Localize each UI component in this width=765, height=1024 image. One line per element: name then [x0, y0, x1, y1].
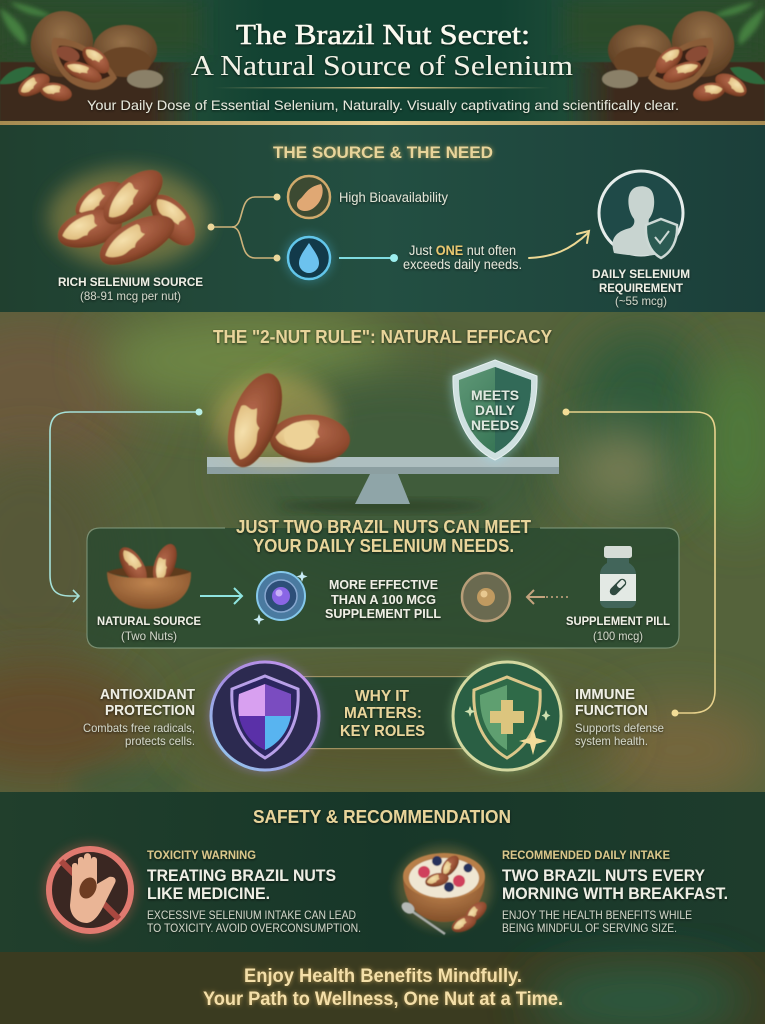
text: more effective: SUPPLEMENT PILL	[325, 606, 441, 621]
chart: balance scale	[207, 358, 559, 511]
title: A Natural Source of Selenium	[191, 50, 573, 82]
text: more effective: MORE EFFECTIVE	[329, 577, 438, 592]
connector: teal line	[339, 254, 398, 262]
connector: gold loop	[562, 408, 715, 716]
title: The Brazil Nut Secret:	[236, 20, 530, 51]
text: antioxidant protection: PROTECTION	[105, 703, 195, 719]
label: supplement pill: SUPPLEMENT PILL	[566, 614, 670, 628]
icon: bowl with nuts	[107, 541, 191, 609]
heading: THE SOURCE & THE NEED	[273, 143, 493, 162]
text: toxicity warning: TREATING BRAZIL NUTS	[147, 866, 336, 885]
background: section one	[0, 125, 765, 312]
panel: the source and the need	[48, 143, 690, 308]
text: recommended daily intake: BEING MINDFUL OF SERVING SIZE.	[502, 921, 677, 935]
text: toxicity warning: LIKE MEDICINE.	[147, 884, 270, 903]
panel: two nut rule	[50, 327, 715, 772]
text: why it matters: WHY IT	[355, 688, 410, 705]
heading: SAFETY & RECOMMENDATION	[253, 807, 511, 827]
panel: why it matters	[83, 660, 664, 772]
band	[300, 676, 470, 749]
label: rich selenium source: (88-91 mcg per nut)	[80, 289, 181, 303]
left forest and nut scene	[0, 0, 200, 121]
label: natural source	[97, 614, 201, 643]
icon: immune shield	[451, 660, 563, 772]
arrow: natural to orb	[200, 588, 242, 604]
closing message: Enjoy Health Benefits Mindfully.	[244, 966, 522, 987]
text: immune function: system health.	[575, 734, 648, 748]
closing message	[203, 966, 563, 1010]
text: recommended daily intake: ENJOY THE HEALTH BENEFITS WHILE	[502, 908, 692, 922]
icon: person with shield	[599, 171, 683, 258]
panel: header	[0, 0, 765, 121]
icon: shield meets daily needs	[451, 358, 539, 463]
right forest and nut scene	[565, 0, 765, 121]
text: recommended daily intake	[502, 848, 728, 935]
text: just one nut: exceeds daily needs.	[403, 257, 522, 272]
label: rich selenium source: RICH SELENIUM SOURCE	[58, 275, 203, 289]
text: antioxidant protection: Combats free radicals,	[83, 721, 195, 735]
label: daily selenium requirement: (~55 mcg)	[615, 294, 667, 308]
background: footer	[0, 952, 765, 1024]
icon: prohibition hand	[43, 843, 137, 937]
arrow: to requirement	[529, 231, 589, 258]
text: meets daily needs: DAILY	[475, 402, 516, 418]
arrow: pill to cell	[527, 590, 570, 604]
text: toxicity warning: EXCESSIVE SELENIUM INTAKE CAN LEAD	[147, 908, 356, 922]
icon: antioxidant shield	[209, 660, 321, 772]
text: meets daily needs	[471, 387, 519, 433]
label: daily selenium requirement: DAILY SELENIUM	[592, 267, 690, 281]
text: immune function	[575, 687, 664, 748]
icon: selenium nuts pile	[48, 160, 208, 274]
text: more effective: THAN A 100 MCG	[331, 592, 436, 607]
icon: supplement bottle	[600, 546, 636, 608]
text: antioxidant protection	[83, 687, 195, 748]
text: toxicity warning: TO TOXICITY. AVOID OVERCONSUMPTION.	[147, 921, 361, 935]
heading: THE "2-NUT RULE": NATURAL EFFICACY	[213, 327, 552, 347]
closing message: Your Path to Wellness, One Nut at a Time.	[203, 989, 563, 1010]
heading: just two brazil nuts: JUST TWO BRAZIL NUTS CAN MEET	[236, 517, 531, 537]
text: more effective	[325, 577, 441, 621]
text: antioxidant protection: ANTIOXIDANT	[100, 687, 195, 703]
icon: breakfast bowl	[396, 846, 492, 935]
text: meets daily needs: MEETS	[471, 387, 519, 403]
text: recommended daily intake: RECOMMENDED DAILY INTAKE	[502, 848, 670, 862]
label: natural source: (Two Nuts)	[121, 629, 177, 643]
text: recommended daily intake: MORNING WITH BREAKFAST.	[502, 884, 728, 903]
label: daily selenium requirement: REQUIREMENT	[599, 281, 684, 295]
text: toxicity warning: TOXICITY WARNING	[147, 848, 256, 862]
text: toxicity warning	[147, 848, 361, 935]
text: why it matters: MATTERS:	[344, 705, 422, 722]
heading: just two brazil nuts	[236, 517, 531, 556]
text: immune function: IMMUNE	[575, 687, 635, 703]
title	[191, 20, 573, 82]
icon: dull cell	[462, 573, 510, 621]
panel: comparison	[87, 517, 679, 648]
subtitle: Your Daily Dose of Essential Selenium, Naturally. Visually captivating and scientifically clear.	[87, 97, 679, 113]
text: why it matters: KEY ROLES	[340, 723, 425, 740]
connector: blue loop	[50, 408, 202, 602]
icon: glowing orb	[254, 571, 308, 625]
label: rich selenium source	[58, 275, 203, 303]
text: meets daily needs: NEEDS	[471, 417, 519, 433]
text: why it matters	[340, 688, 425, 740]
heading: just two brazil nuts: YOUR DAILY SELENIUM NEEDS.	[253, 536, 514, 556]
label: daily selenium requirement	[592, 267, 690, 308]
text: high bioavailability: High Bioavailability	[339, 190, 448, 205]
text: antioxidant protection: protects cells.	[125, 734, 195, 748]
text: recommended daily intake: TWO BRAZIL NUTS EVERY	[502, 866, 706, 885]
text: immune function: FUNCTION	[575, 703, 648, 719]
label: natural source: NATURAL SOURCE	[97, 614, 201, 628]
label: supplement pill: (100 mcg)	[593, 629, 643, 643]
text: immune function: Supports defense	[575, 721, 664, 735]
label: supplement pill	[566, 614, 670, 643]
icon: two brazil nuts	[213, 366, 352, 474]
text: just one nut: Just ONE nut often	[409, 243, 516, 258]
connector: branching lines	[208, 194, 280, 262]
icon: water drop	[285, 234, 333, 282]
background: section three	[0, 792, 765, 952]
background: section two blurred forest	[0, 310, 765, 805]
text: just one nut	[403, 243, 522, 272]
panel: safety and recommendation	[43, 807, 728, 937]
icon: bioavailability	[288, 176, 330, 218]
